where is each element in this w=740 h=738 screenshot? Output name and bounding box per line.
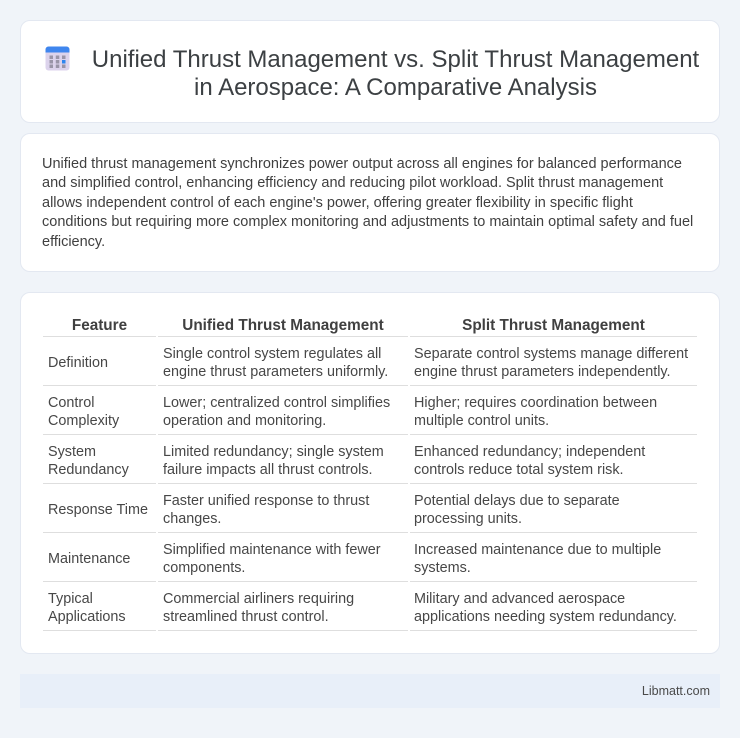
intro text: conditions but requiring more complex monitoring and adjustments to maintain optimal safety and fuel	[42, 214, 693, 230]
row: system redundancy: Redundancy	[48, 462, 129, 478]
row: control complexity	[48, 395, 657, 429]
row: control complexity: Higher; requires coordination between	[414, 395, 657, 411]
footer credit: Libmatt.com	[642, 684, 710, 698]
title: Unified Thrust Management vs. Split Thrust Management	[92, 46, 699, 72]
row: control complexity: operation and monitoring.	[163, 413, 326, 429]
row: response time: processing units.	[414, 511, 522, 527]
intro card	[20, 133, 720, 272]
row: system redundancy: controls reduce total system risk.	[414, 462, 624, 478]
row: control complexity: Complexity	[48, 413, 119, 429]
row: maintenance: Maintenance	[48, 551, 130, 567]
row: definition: Definition	[48, 355, 108, 371]
row: definition: Single control system regulates all	[163, 346, 381, 362]
intro text	[42, 156, 693, 250]
row: response time: Response Time	[48, 502, 148, 518]
header: feature: Feature	[72, 317, 127, 334]
row: control complexity: Control	[48, 395, 94, 411]
header: split: Split Thrust Management	[462, 317, 645, 334]
header: unified: Unified Thrust Management	[182, 317, 384, 334]
footer bar	[20, 674, 720, 708]
row: response time	[48, 493, 620, 527]
row: definition: engine thrust parameters independently.	[414, 364, 671, 380]
row: typical applications: Commercial airliners requiring	[163, 591, 354, 607]
row: response time: Faster unified response to thrust	[163, 493, 369, 509]
row: system redundancy: failure impacts all thrust controls.	[163, 462, 373, 478]
row: maintenance: components.	[163, 560, 245, 576]
intro text: Unified thrust management synchronizes power output across all engines for balanced performance	[42, 156, 682, 172]
row: definition	[48, 346, 688, 380]
row: typical applications: streamlined thrust control.	[163, 609, 329, 625]
row: system redundancy: System	[48, 444, 96, 460]
row: control complexity: multiple control units.	[414, 413, 549, 429]
row: maintenance: Increased maintenance due to multiple	[414, 542, 661, 558]
row: system redundancy	[48, 444, 646, 478]
row: typical applications: Applications	[48, 609, 126, 625]
row: maintenance	[48, 542, 661, 576]
row: system redundancy: Limited redundancy; single system	[163, 444, 384, 460]
row: response time: Potential delays due to separate	[414, 493, 620, 509]
intro text: efficiency.	[42, 234, 105, 250]
row: typical applications: Typical	[48, 591, 93, 607]
row: definition: Separate control systems manage different	[414, 346, 688, 362]
row: response time: changes.	[163, 511, 221, 527]
row: control complexity: Lower; centralized control simplifies	[163, 395, 390, 411]
row: system redundancy: Enhanced redundancy; independent	[414, 444, 645, 460]
title: in Aerospace: A Comparative Analysis	[194, 74, 597, 101]
row: typical applications: applications needing system redundancy.	[414, 609, 677, 625]
table card	[20, 292, 720, 654]
row: typical applications: Military and advanced aerospace	[414, 591, 625, 607]
title	[92, 46, 699, 101]
row: maintenance: Simplified maintenance with fewer	[163, 542, 381, 558]
comparison table	[43, 317, 697, 631]
row: definition: engine thrust parameters uniformly.	[163, 364, 388, 380]
icon: calendar	[46, 46, 70, 70]
header card	[20, 20, 720, 123]
intro text: and simplified control, enhancing efficiency and reducing pilot workload. Split thrust management	[42, 175, 663, 191]
row: typical applications	[48, 591, 677, 625]
intro text: allows independent control of each engine's power, offering greater flexibility in specific flight	[42, 194, 633, 210]
row: maintenance: systems.	[414, 560, 471, 576]
